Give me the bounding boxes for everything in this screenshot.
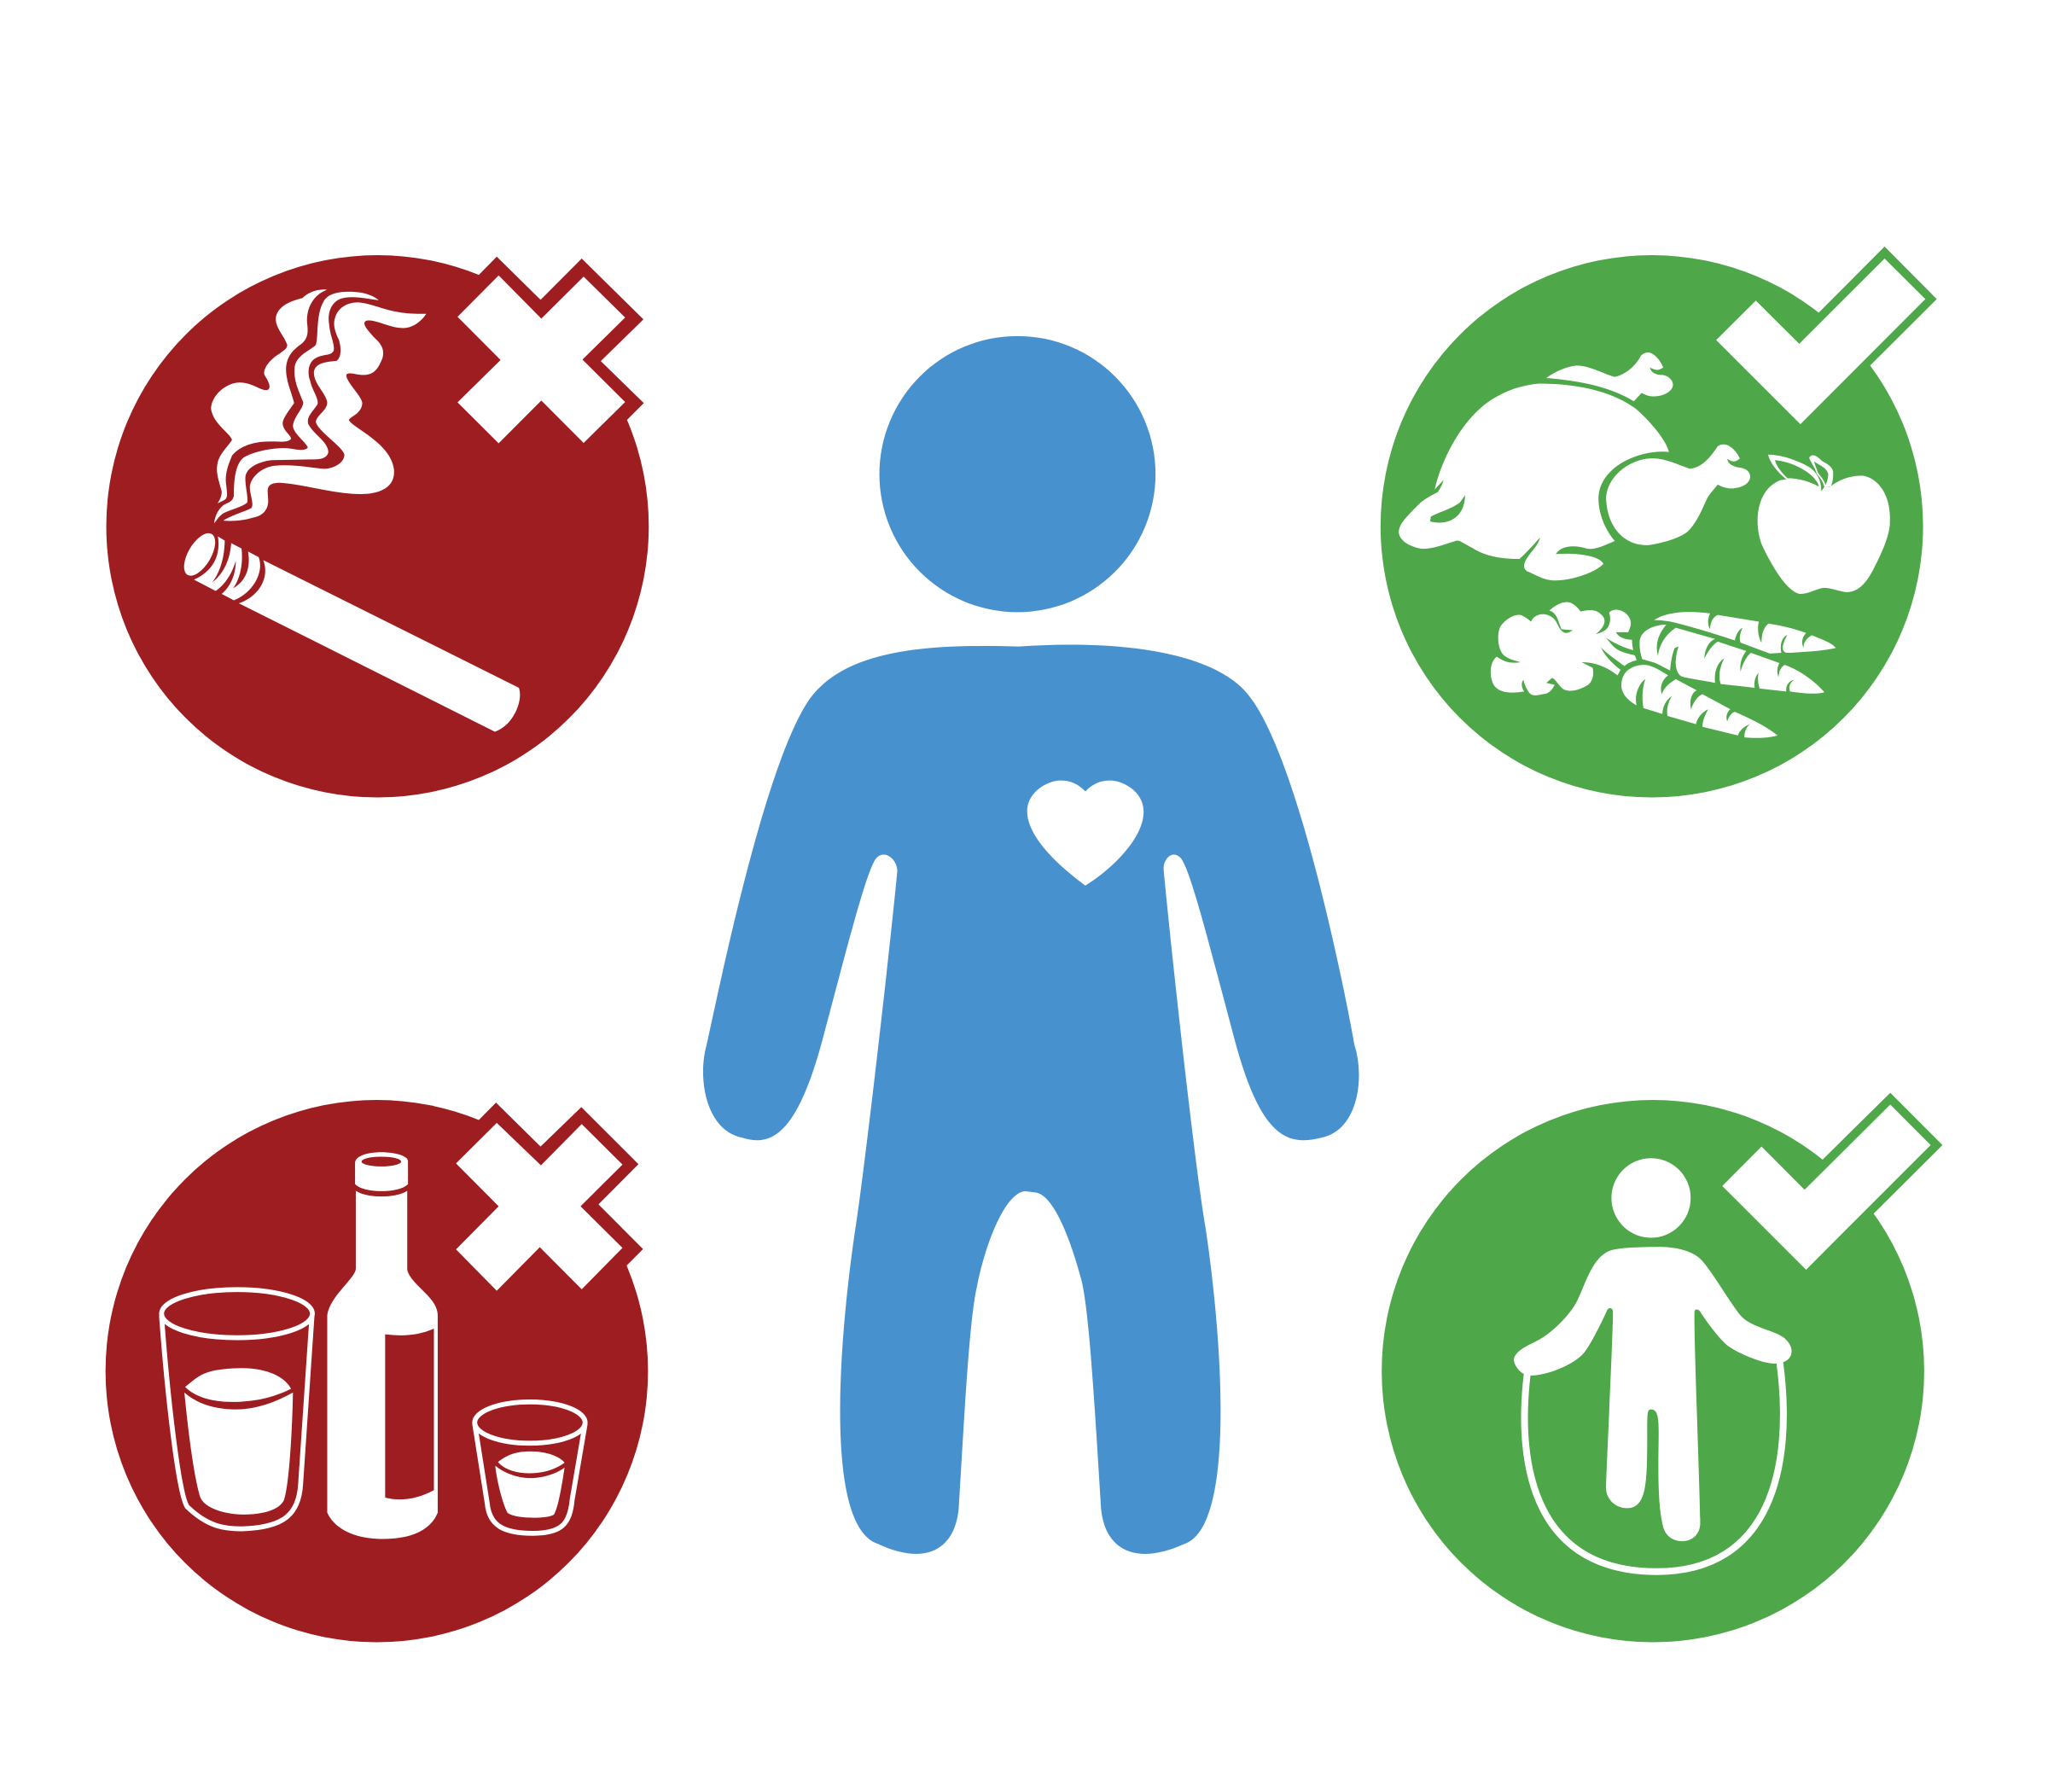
red circle bbox=[107, 255, 649, 797]
icon: bottle bbox=[327, 1152, 438, 1539]
panel: healthy food bbox=[1381, 247, 1937, 797]
person body bbox=[703, 644, 1359, 1554]
icon: carrots bbox=[1491, 602, 1836, 738]
icon: smoke bbox=[211, 289, 427, 523]
central figure: person with heart bbox=[703, 336, 1359, 1554]
green circle bbox=[1382, 1100, 1924, 1642]
panel: no smoking bbox=[107, 255, 649, 797]
red circle bbox=[106, 1100, 648, 1642]
white heart bbox=[1027, 781, 1143, 886]
X mark bbox=[438, 257, 643, 463]
icon: cigarette bbox=[177, 528, 520, 731]
icon: apple bbox=[1758, 475, 1890, 594]
chicken wing detail bbox=[1430, 495, 1465, 522]
X mark bbox=[436, 1103, 643, 1310]
green circle bbox=[1381, 255, 1923, 797]
icon: person skipping rope bbox=[1514, 1158, 1792, 1572]
icon: large glass bbox=[161, 1289, 312, 1529]
icon: small glass bbox=[474, 1402, 585, 1533]
person head bbox=[880, 336, 1155, 612]
apple leaf and stem bbox=[1768, 455, 1833, 492]
check mark bbox=[1704, 247, 1937, 435]
panel: no alcohol bbox=[106, 1100, 648, 1642]
icon: roast chicken bbox=[1399, 352, 1750, 580]
panel: exercise bbox=[1382, 1093, 1942, 1642]
check mark bbox=[1710, 1093, 1942, 1281]
